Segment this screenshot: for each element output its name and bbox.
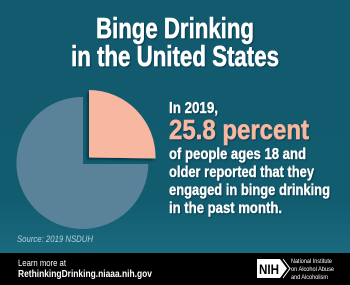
NIH institute name: on Alcohol Abuse — [291, 266, 334, 273]
statistic text — [169, 100, 330, 217]
title: Binge Drinking — [96, 13, 254, 45]
source note: Source: 2019 NSDUH — [17, 234, 93, 244]
description: older reported that they — [169, 164, 314, 181]
NIH institute name: and Alcoholism — [291, 274, 328, 281]
learn more text: Learn more at — [18, 258, 66, 269]
website URL: RethinkingDrinking.niaaa.nih.gov — [18, 269, 152, 280]
pie slice: remaining share — [16, 97, 148, 229]
pie slice: 25.8 percent — [89, 90, 156, 158]
pie chart — [16, 90, 156, 229]
title — [71, 13, 279, 73]
NIH institute name — [291, 258, 334, 281]
NIH logo: NIH — [259, 262, 279, 277]
highlighted statistic: 25.8 percent — [169, 114, 309, 145]
footer bar — [0, 253, 350, 285]
title: in the United States — [71, 41, 279, 73]
NIH logo — [257, 259, 290, 278]
NIH institute name: National Institute — [291, 258, 332, 265]
intro line: In 2019, — [169, 100, 218, 117]
description: of people ages 18 and — [169, 146, 306, 163]
description: in the past month. — [169, 200, 282, 217]
description — [169, 146, 330, 217]
